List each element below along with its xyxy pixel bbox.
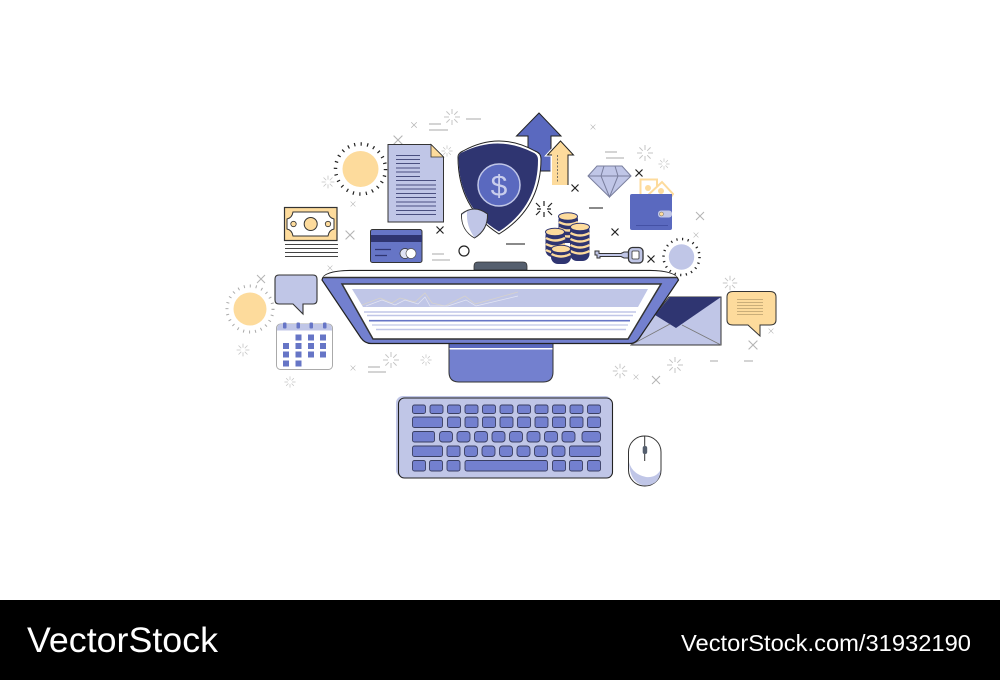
icon: up arrows [516, 113, 574, 185]
monitor screen [342, 284, 661, 339]
monitor camera tab [474, 262, 527, 270]
keyboard keys [412, 405, 600, 471]
icon: document [388, 144, 444, 222]
icon: wallet with money [630, 180, 673, 230]
icon: purple speech bubble [275, 275, 317, 314]
icon: main shield with dollar [458, 141, 541, 234]
monitor frame [322, 270, 678, 344]
coin stack front [551, 245, 571, 264]
icon: banknote [284, 208, 338, 256]
icon: calendar [276, 322, 332, 370]
icon: envelope [631, 297, 721, 345]
coin stack back [558, 213, 578, 243]
monitor stand [449, 343, 553, 382]
icon: sun left [227, 286, 273, 332]
icon: small shield [461, 209, 488, 238]
icon: diamond [588, 166, 631, 197]
icon: sun top left [336, 144, 386, 194]
icon: yellow speech bubble [727, 292, 776, 336]
monitor [322, 262, 678, 382]
icon: coin stacks [546, 213, 590, 264]
icon: purple sun [664, 239, 700, 275]
chart panel [352, 289, 648, 307]
coin stack left [546, 228, 565, 257]
keyboard [396, 396, 612, 478]
footer image id: VectorStock.com/31932190 [681, 630, 971, 656]
monitor top bezel [323, 271, 677, 277]
icon: mouse [628, 436, 661, 486]
icon: key [595, 248, 643, 263]
footer bar [0, 600, 1000, 680]
icon: main shield with dollar: $ [491, 170, 508, 203]
icon: credit card [370, 230, 422, 262]
coin stack right [570, 223, 590, 261]
footer logo text: VectorStock [27, 621, 219, 660]
decorative sparkles and crosses [237, 109, 773, 388]
